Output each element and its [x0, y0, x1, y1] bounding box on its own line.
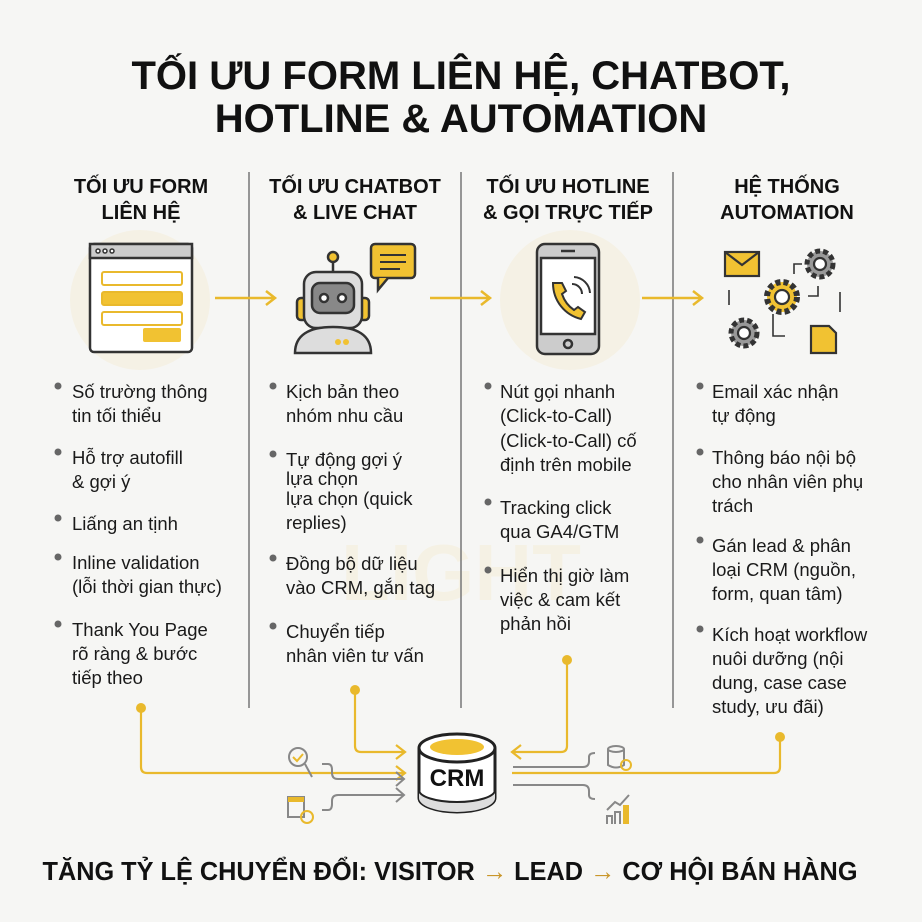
bullets col 4: Email xác nhận — [712, 381, 838, 402]
footer tagline: TĂNG TỶ LỆ CHUYỂN ĐỔI: VISITOR → LEAD → CƠ HỘI BÁN HÀNG — [42, 856, 858, 886]
column headings: LIÊN HỆ — [102, 200, 180, 224]
column headings: & LIVE CHAT — [293, 202, 417, 224]
bullets col 4: trách — [712, 495, 753, 516]
bullets col 4: cho nhân viên phụ — [712, 471, 863, 492]
icon: phone — [537, 244, 599, 354]
bullets col 1: (lỗi thời gian thực) — [72, 576, 222, 597]
bullets col 3: việc & cam kết — [500, 589, 620, 610]
bullets col 2: Kịch bản theo — [286, 381, 399, 402]
bullets col 4: study, ưu đãi) — [712, 696, 824, 717]
bullets col 3: qua GA4/GTM — [500, 521, 619, 542]
bullets col 1: & gợi ý — [72, 471, 131, 492]
bullets col 3: Tracking click — [500, 497, 612, 518]
bullets col 2: replies) — [286, 512, 347, 533]
watermark — [70, 230, 640, 617]
bullets col 3 — [484, 381, 637, 634]
bullets col 2 — [270, 381, 435, 666]
bullets col 3: Hiển thị giờ làm — [500, 565, 629, 586]
bullets col 4: Gán lead & phân — [712, 535, 851, 556]
bullets col 1 — [54, 381, 222, 688]
bullets col 2: Tự động gợi ý — [286, 449, 403, 470]
column headings: TỐI ƯU CHATBOT — [269, 174, 441, 198]
column headings: AUTOMATION — [720, 202, 854, 224]
bullets col 2: lựa chọn — [286, 468, 358, 489]
watermark: LIGHT — [341, 528, 581, 617]
bullets col 2: nhân viên tư vấn — [286, 645, 424, 666]
bullets col 2: nhóm nhu cầu — [286, 405, 403, 426]
title: TỐI ƯU FORM LIÊN HỆ, CHATBOT, — [131, 52, 791, 98]
bullets col 1: tiếp theo — [72, 667, 143, 688]
bullets col 4: Kích hoạt workflow — [712, 624, 868, 645]
icon: automation — [725, 251, 840, 353]
bullets col 1: Số trường thông — [72, 381, 208, 402]
bullets col 1: rõ ràng & bước — [72, 643, 197, 664]
CRM cylinder — [419, 734, 495, 812]
bullets col 4: Thông báo nội bộ — [712, 447, 856, 468]
bullets col 2: Đồng bộ dữ liệu — [286, 553, 418, 574]
bullets col 2: Chuyển tiếp — [286, 621, 385, 642]
title: HOTLINE & AUTOMATION — [215, 97, 707, 141]
bullets col 4: nuôi dưỡng (nội — [712, 648, 844, 669]
bullets col 1: tin tối thiểu — [72, 405, 161, 426]
bullets col 3: phản hồi — [500, 613, 571, 634]
connectors to CRM — [141, 660, 780, 780]
bullets col 4: form, quan tâm) — [712, 583, 843, 604]
bullets col 1: Liấng an tịnh — [72, 513, 178, 534]
bullets col 4: tự động — [712, 405, 776, 426]
bullets col 2: lựa chọn (quick — [286, 488, 413, 509]
dividers — [249, 172, 673, 708]
bullets col 3: (Click-to-Call) cố — [500, 430, 637, 451]
bullets col 1: Inline validation — [72, 552, 200, 573]
arrows between columns — [215, 291, 702, 305]
title — [131, 52, 791, 141]
icon: robot — [295, 244, 415, 353]
column headings: HỆ THỐNG — [734, 174, 840, 198]
column headings — [74, 174, 854, 224]
icon: form — [90, 244, 192, 352]
column headings: & GỌI TRỰC TIẾP — [483, 201, 653, 224]
bullets col 1: Thank You Page — [72, 619, 208, 640]
column headings: TỐI ƯU HOTLINE — [486, 174, 650, 198]
bullets col 2: vào CRM, gắn tag — [286, 577, 435, 598]
CRM cylinder: CRM — [430, 765, 484, 792]
small icons — [288, 746, 631, 824]
bullets col 1: Hỗ trợ autofill — [72, 447, 183, 468]
bullets col 3: (Click-to-Call) — [500, 405, 612, 426]
bullets col 3: định trên mobile — [500, 454, 632, 475]
column headings: TỐI ƯU FORM — [74, 174, 208, 198]
bullets col 4 — [696, 381, 868, 717]
bullets col 3: Nút gọi nhanh — [500, 381, 615, 402]
bullets col 4: dung, case case — [712, 672, 847, 693]
bullets col 4: loại CRM (nguồn, — [712, 559, 856, 580]
